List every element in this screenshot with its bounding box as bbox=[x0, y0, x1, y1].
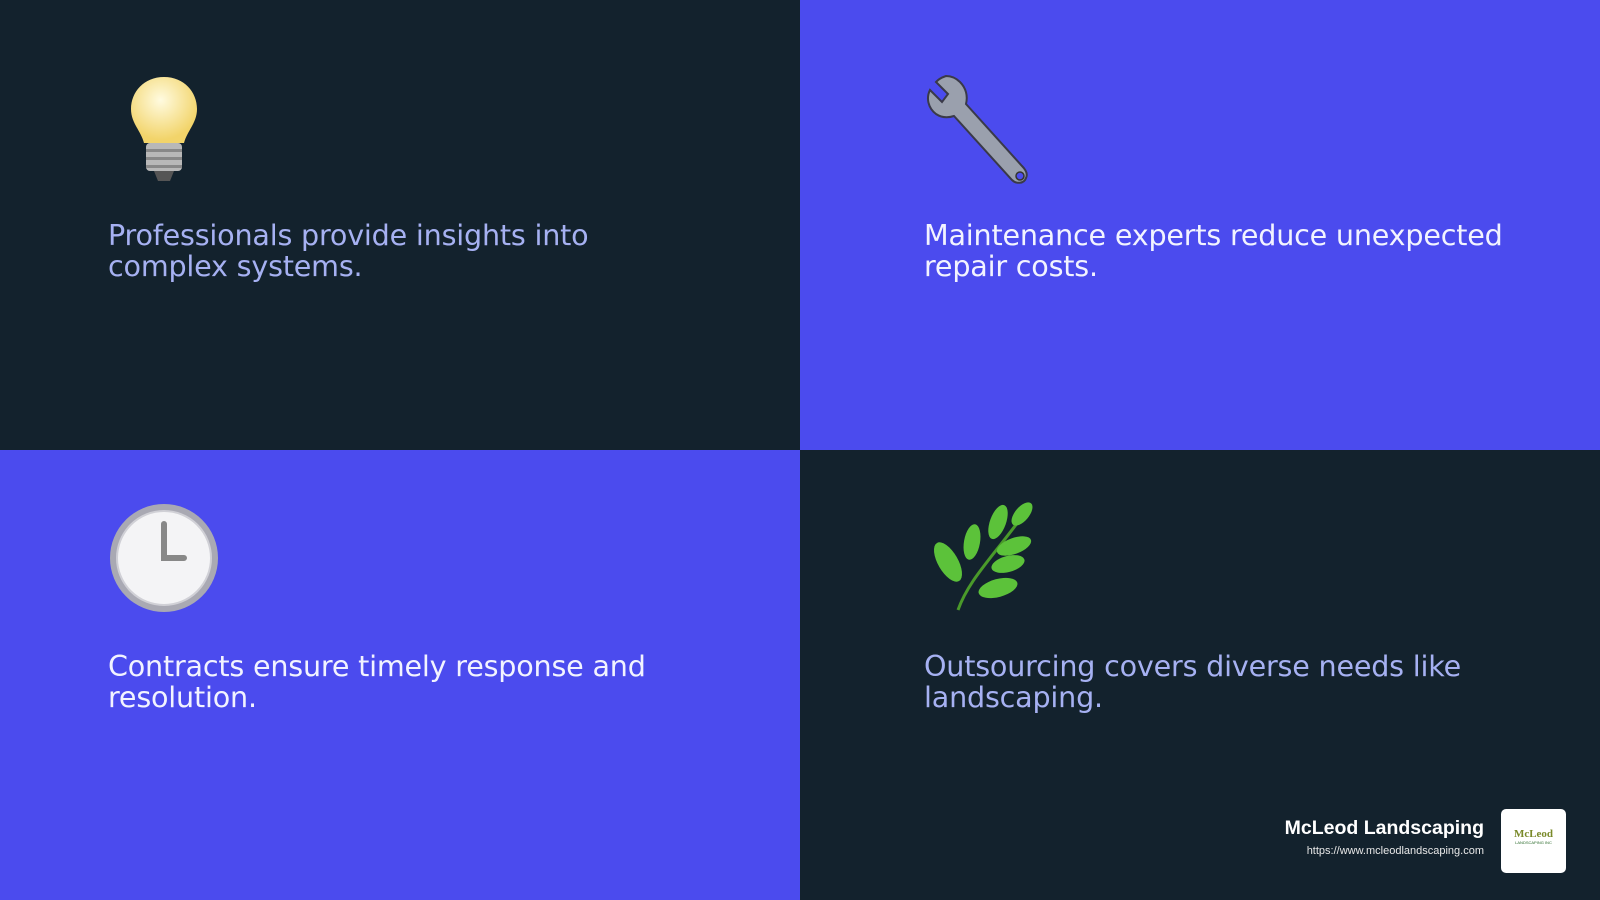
logo: LANDSCAPING INC bbox=[1515, 840, 1552, 845]
text: insights: Professionals provide insights into bbox=[108, 218, 588, 252]
panel: outsourcing bbox=[800, 450, 1600, 900]
text: contracts: resolution. bbox=[108, 680, 257, 714]
text: maintenance: repair costs. bbox=[924, 248, 1098, 282]
text: contracts: Contracts ensure timely response and bbox=[108, 649, 646, 683]
panel: contracts bbox=[0, 450, 800, 900]
text: contracts bbox=[108, 649, 646, 714]
panel: maintenance bbox=[800, 0, 1600, 450]
brand url: https://www.mcleodlandscaping.com bbox=[1307, 845, 1484, 857]
brand name: McLeod Landscaping bbox=[1285, 817, 1484, 839]
text: maintenance bbox=[924, 218, 1503, 282]
logo: McLeod bbox=[1514, 828, 1553, 840]
text: outsourcing: Outsourcing covers diverse needs like bbox=[924, 649, 1461, 683]
panel: insights bbox=[0, 0, 800, 450]
logo bbox=[1501, 809, 1566, 873]
icon: clock bbox=[110, 504, 218, 612]
text: insights: complex systems. bbox=[108, 248, 362, 282]
icon: wrench bbox=[927, 75, 1028, 184]
text: outsourcing bbox=[924, 649, 1461, 714]
text: maintenance: Maintenance experts reduce unexpected bbox=[924, 218, 1503, 252]
icon: light bulb bbox=[131, 77, 197, 181]
brand block bbox=[1285, 809, 1566, 873]
text: outsourcing: landscaping. bbox=[924, 680, 1103, 714]
text: insights bbox=[108, 218, 588, 282]
icon: herb leaves bbox=[934, 502, 1032, 610]
